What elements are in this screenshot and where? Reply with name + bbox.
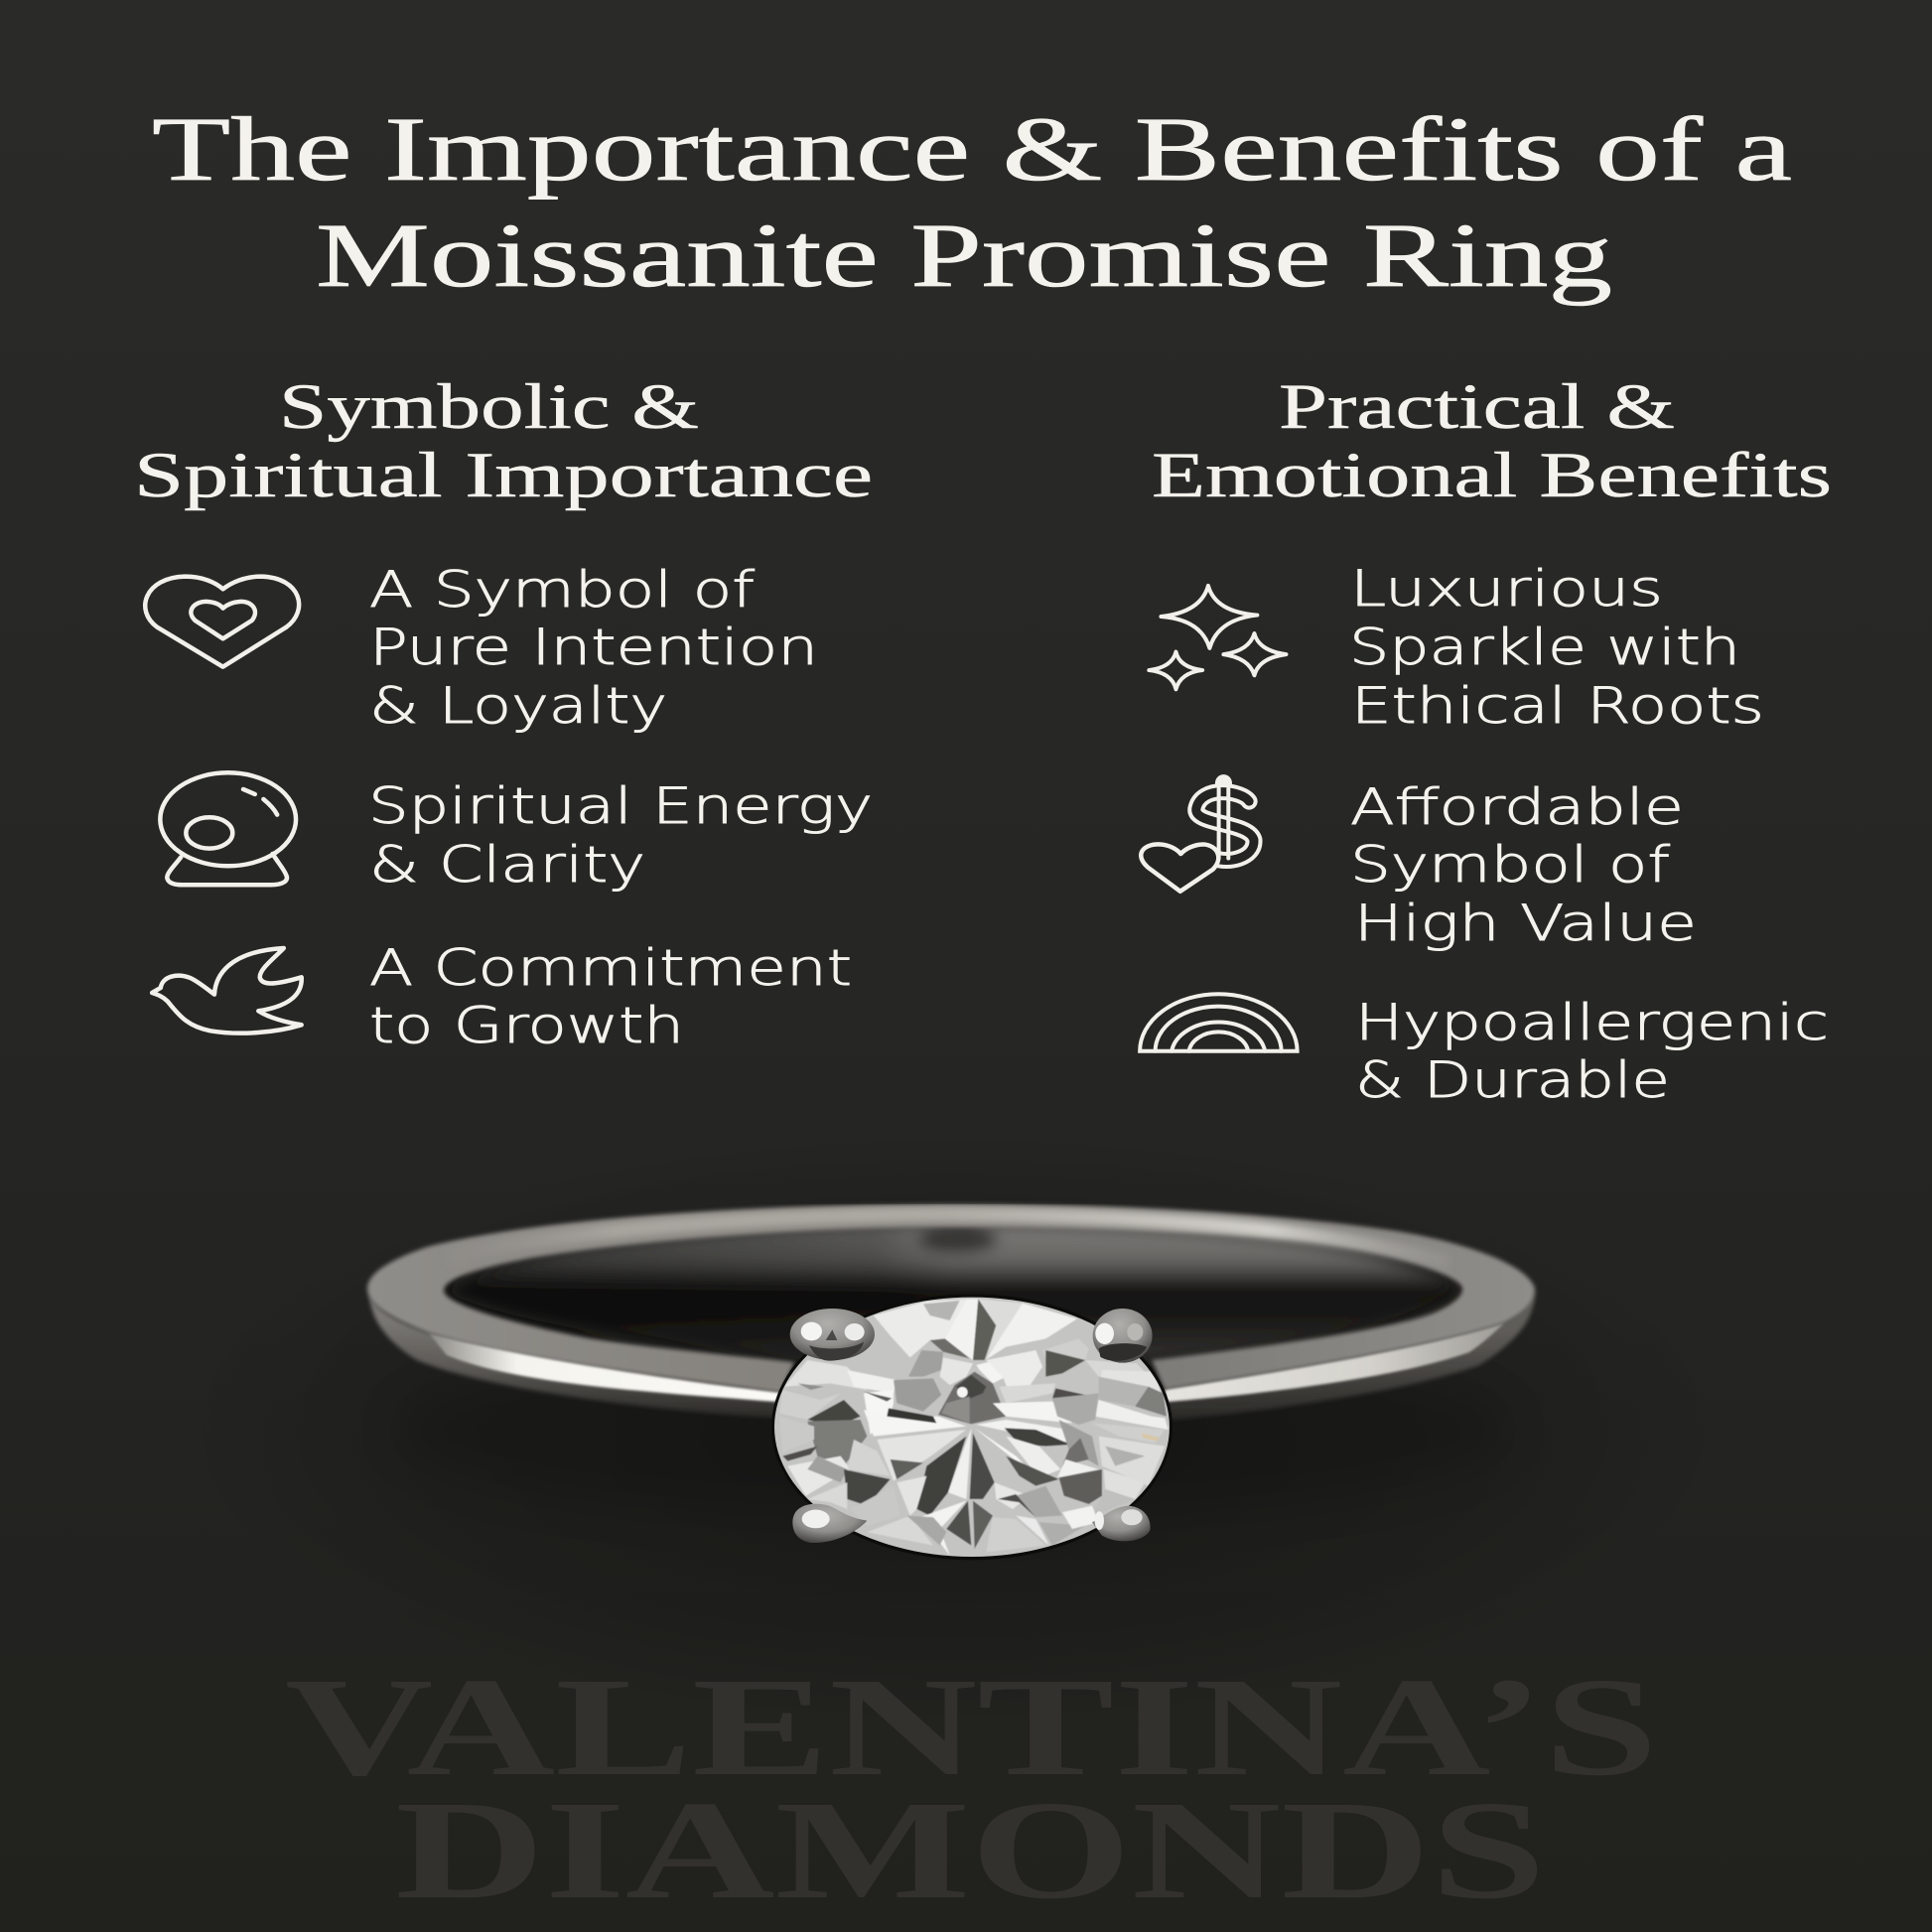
heading: practical and emotional benefits: Emotional Benefits [1152,440,1832,511]
watermark: valentina's diamonds: VALENTINA’S [285,1648,1658,1805]
text: a commitment to growth: to Growth [369,997,684,1054]
ring illustration [365,1201,1537,1561]
highlight left [429,1333,781,1402]
band bright arc [447,1214,1449,1263]
highlight right [1165,1323,1504,1402]
text: luxurious sparkle with ethical roots: Ethical Roots [1351,677,1764,735]
text: spiritual energy and clarity [368,777,873,894]
text: hypoallergenic and durable: & Durable [1355,1051,1670,1109]
icon: rainbow [1140,994,1298,1051]
panel: practical and emotional benefits [1140,371,1832,1109]
heading: symbolic and spiritual importance: Spiritual Importance [134,440,873,511]
watermark: valentina's diamonds: DIAMONDS [395,1771,1546,1928]
text: affordable symbol of high value: Affordable [1350,778,1684,836]
text: hypoallergenic and durable: Hypoallergenic [1355,994,1829,1051]
text: a symbol of pure intention and loyalty: A Symbol of [369,561,755,619]
text: luxurious sparkle with ethical roots [1349,560,1764,735]
band sides [369,1291,1534,1420]
icon: crystal ball [160,772,296,885]
text: a symbol of pure intention and loyalty [369,561,818,735]
title: Moissanite Promise Ring [316,205,1612,306]
text: a commitment to growth [369,939,852,1054]
text: hypoallergenic and durable [1355,994,1829,1109]
diamond [767,1291,1178,1566]
icon: dollar and heart [1141,783,1254,892]
prong: bottom left [792,1504,867,1543]
text: a symbol of pure intention and loyalty: & Loyalty [369,677,667,735]
title: The Importance & Benefits of a [152,98,1792,200]
watermark: valentina's diamonds [285,1648,1658,1928]
text: affordable symbol of high value: Symbol of [1350,836,1671,894]
text: luxurious sparkle with ethical roots: Luxurious [1350,560,1663,618]
text: spiritual energy and clarity: & Clarity [369,836,645,894]
text: affordable symbol of high value: High Value [1354,895,1697,952]
text: a commitment to growth: A Commitment [369,939,852,997]
icon: dove [152,948,302,1034]
band top face [367,1204,1535,1393]
heading: symbolic and spiritual importance [134,371,873,511]
title [152,98,1792,306]
heading: practical and emotional benefits [1152,371,1832,511]
text: affordable symbol of high value [1350,778,1697,952]
icon: sparkles [1149,586,1286,689]
band inner surface [444,1223,1462,1362]
heading: symbolic and spiritual importance: Symbolic & [279,371,699,443]
prong: top left [790,1309,875,1361]
prong: bottom right [1092,1506,1151,1541]
icon: heart [145,577,299,667]
prong: top right [1093,1309,1153,1363]
heading: practical and emotional benefits: Practical & [1279,371,1675,443]
text: luxurious sparkle with ethical roots: Sparkle with [1349,619,1740,676]
panel: symbolic and spiritual importance [134,371,873,1054]
text: a symbol of pure intention and loyalty: Pure Intention [369,619,818,676]
text: spiritual energy and clarity: Spiritual Energy [368,777,873,835]
